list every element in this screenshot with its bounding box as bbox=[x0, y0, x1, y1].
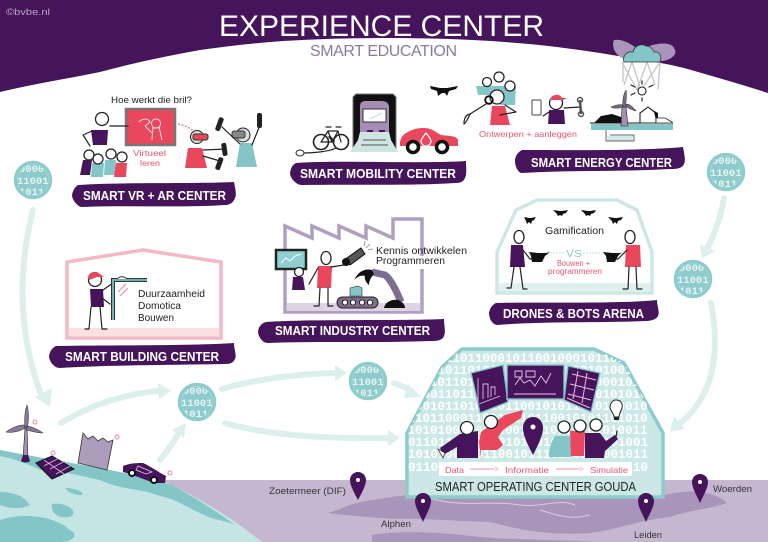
binary pattern: 010110110101101011001101010001011 bbox=[400, 376, 648, 390]
data node 2: 0000 bbox=[712, 156, 737, 168]
drone bbox=[430, 86, 458, 96]
location pin large bbox=[523, 417, 543, 455]
title: EXPERIENCE CENTER bbox=[219, 10, 544, 43]
building shell bbox=[407, 349, 663, 497]
drones bbox=[524, 210, 623, 224]
data node 3: 0000 bbox=[679, 263, 704, 275]
arena outline bbox=[497, 200, 652, 293]
factory outline bbox=[285, 219, 422, 312]
lightbulb bbox=[610, 400, 622, 420]
map of the region bbox=[328, 491, 727, 542]
banner label: SMART BUILDING CENTER bbox=[65, 350, 219, 364]
team right bbox=[549, 419, 618, 458]
banner label: SMART VR + AR CENTER bbox=[83, 189, 226, 203]
subtitle: SMART EDUCATION bbox=[310, 43, 457, 60]
building text: Domotica bbox=[138, 301, 181, 312]
data node 2 bbox=[708, 154, 744, 191]
knowledge text: Programmeren bbox=[376, 256, 445, 267]
data node 1: 0000 bbox=[19, 164, 44, 176]
data node 5: 0000 bbox=[354, 365, 379, 377]
banner bbox=[489, 300, 659, 325]
data node 1: 11001 bbox=[17, 176, 49, 188]
data node 4: 11001 bbox=[181, 398, 213, 410]
data node 4: 0000 bbox=[183, 386, 208, 398]
data information simulation strip: Informatie bbox=[505, 465, 549, 475]
arrows bbox=[23, 198, 724, 460]
data node 4: 1011 bbox=[183, 409, 208, 421]
building text: Duurzaamheid bbox=[138, 289, 205, 300]
copyright: ©bvbe.nl bbox=[6, 7, 50, 17]
pin: alphen bbox=[381, 493, 431, 529]
binary pattern: 011011000110010110110010101101010 bbox=[400, 412, 648, 426]
right player bbox=[603, 230, 642, 289]
knowledge text bbox=[376, 246, 467, 267]
vs line bbox=[550, 249, 602, 260]
globe bbox=[0, 450, 262, 542]
bouwen text: programmeren bbox=[548, 266, 602, 276]
banner bbox=[49, 343, 236, 368]
vr user red bbox=[185, 130, 228, 171]
icon: wind turbine bbox=[6, 405, 43, 462]
pin: leiden: Leiden bbox=[634, 530, 662, 540]
data node 5: 11001 bbox=[352, 377, 384, 389]
header band bbox=[0, 0, 768, 93]
data information simulation strip: Data bbox=[445, 465, 464, 475]
screen right bbox=[564, 366, 600, 412]
binary pattern: 01100100110100101001011010100110 bbox=[408, 461, 648, 475]
leren: leren bbox=[140, 158, 160, 168]
car bbox=[400, 128, 458, 152]
vs line: VS bbox=[566, 249, 582, 260]
laser tool bbox=[342, 241, 373, 266]
small person bbox=[292, 268, 305, 290]
banner bbox=[258, 319, 445, 343]
house outline bbox=[67, 250, 221, 338]
pin: zoetermeer: Zoetermeer (DIF) bbox=[269, 486, 346, 496]
data node 2: 11001 bbox=[710, 168, 742, 180]
cloud and antenna bbox=[613, 40, 675, 90]
pink dotted pointer bbox=[178, 124, 195, 132]
panel: smart building center bbox=[49, 250, 236, 368]
icon: purple car bbox=[123, 463, 166, 483]
binary pattern: 101101011010011010110110010100101 bbox=[400, 364, 648, 378]
gamification: Gamification bbox=[545, 226, 604, 237]
data node 1 bbox=[16, 162, 50, 199]
panel: smart mobility center bbox=[290, 86, 466, 185]
banner bbox=[290, 161, 466, 185]
banner label: SMART INDUSTRY CENTER bbox=[275, 324, 430, 338]
data node 1: 1011 bbox=[19, 187, 44, 199]
data node 2: 1011 bbox=[712, 179, 737, 191]
train bbox=[350, 94, 398, 152]
panel: smart vr + ar center bbox=[72, 95, 262, 207]
floor bbox=[69, 328, 219, 336]
screen left bbox=[471, 365, 508, 413]
data node 5: 1011 bbox=[354, 388, 379, 400]
binary pattern bbox=[400, 352, 648, 475]
banner bbox=[72, 182, 236, 207]
panel: smart energy center bbox=[464, 40, 685, 173]
pin: leiden bbox=[634, 493, 662, 540]
bouwen text bbox=[548, 258, 602, 276]
knowledge text: Kennis ontwikkelen bbox=[376, 246, 467, 257]
building text: Bouwen bbox=[138, 313, 174, 324]
team left bbox=[438, 410, 523, 458]
data node 3 bbox=[676, 262, 710, 298]
banner bbox=[515, 147, 685, 173]
arena floor bbox=[499, 283, 650, 292]
ontwerpen: Ontwerpen + aanleggen bbox=[479, 129, 577, 139]
smart energy landscape bbox=[590, 90, 673, 141]
data node 3: 11001 bbox=[677, 275, 709, 287]
panel: smart industry center bbox=[258, 219, 467, 343]
binary pattern: 010010110100101100101011010110010 bbox=[400, 400, 648, 414]
data information simulation strip bbox=[439, 462, 632, 476]
pin: alphen: Alphen bbox=[381, 519, 411, 529]
data information simulation strip: Simulatie bbox=[590, 465, 628, 475]
banner label: DRONES & BOTS ARENA bbox=[503, 307, 644, 321]
signal marks bbox=[33, 420, 172, 475]
robot arm bbox=[337, 269, 405, 308]
binary pattern: 110101001101010011010110101010011 bbox=[400, 424, 648, 438]
panel: drones and bots arena bbox=[489, 200, 659, 325]
panel: smart operating center gouda bbox=[400, 349, 663, 497]
building text bbox=[138, 289, 205, 324]
data node 4 bbox=[180, 384, 214, 421]
pin: zoetermeer bbox=[269, 472, 366, 500]
question text: Hoe werkt die bril? bbox=[111, 95, 192, 106]
monitor bbox=[276, 250, 306, 269]
icon: factory bbox=[78, 433, 113, 470]
binary pattern: 10101001101100101110110101001011 bbox=[408, 448, 648, 462]
data node 5 bbox=[350, 364, 386, 400]
red person bbox=[309, 252, 344, 306]
bottom plain bbox=[160, 480, 768, 542]
vr user teal bbox=[215, 113, 262, 167]
factory floor bbox=[287, 303, 420, 311]
screen bbox=[126, 109, 175, 145]
builder bbox=[85, 272, 113, 329]
left player bbox=[507, 230, 550, 289]
teacher bbox=[83, 112, 128, 146]
window frame bbox=[113, 277, 147, 320]
pin: woerden bbox=[692, 474, 752, 503]
binary pattern: 01101101101001011010100101101001 bbox=[408, 436, 648, 450]
sun bbox=[631, 81, 653, 101]
screen middle bbox=[507, 365, 564, 399]
banner label: SMART ENERGY CENTER bbox=[531, 156, 672, 170]
bouwen text: Bouwen + bbox=[557, 258, 590, 268]
center label: SMART OPERATING CENTER GOUDA bbox=[435, 480, 637, 494]
data node 3: 1011 bbox=[679, 286, 704, 298]
binary pattern: 110001101100110101011010010101010 bbox=[400, 388, 648, 402]
virtueel leren: Virtueel bbox=[133, 148, 166, 158]
pin hole bbox=[530, 424, 536, 430]
banner label: SMART MOBILITY CENTER bbox=[300, 167, 456, 181]
planners bbox=[464, 72, 516, 125]
pin: woerden: Woerden bbox=[713, 484, 752, 494]
installer bbox=[532, 95, 584, 124]
audience bbox=[80, 149, 127, 177]
binary pattern: 001100110110001011001000101101010 bbox=[400, 352, 648, 366]
icon: solar panel bbox=[36, 456, 74, 479]
bicycle bbox=[296, 127, 348, 156]
